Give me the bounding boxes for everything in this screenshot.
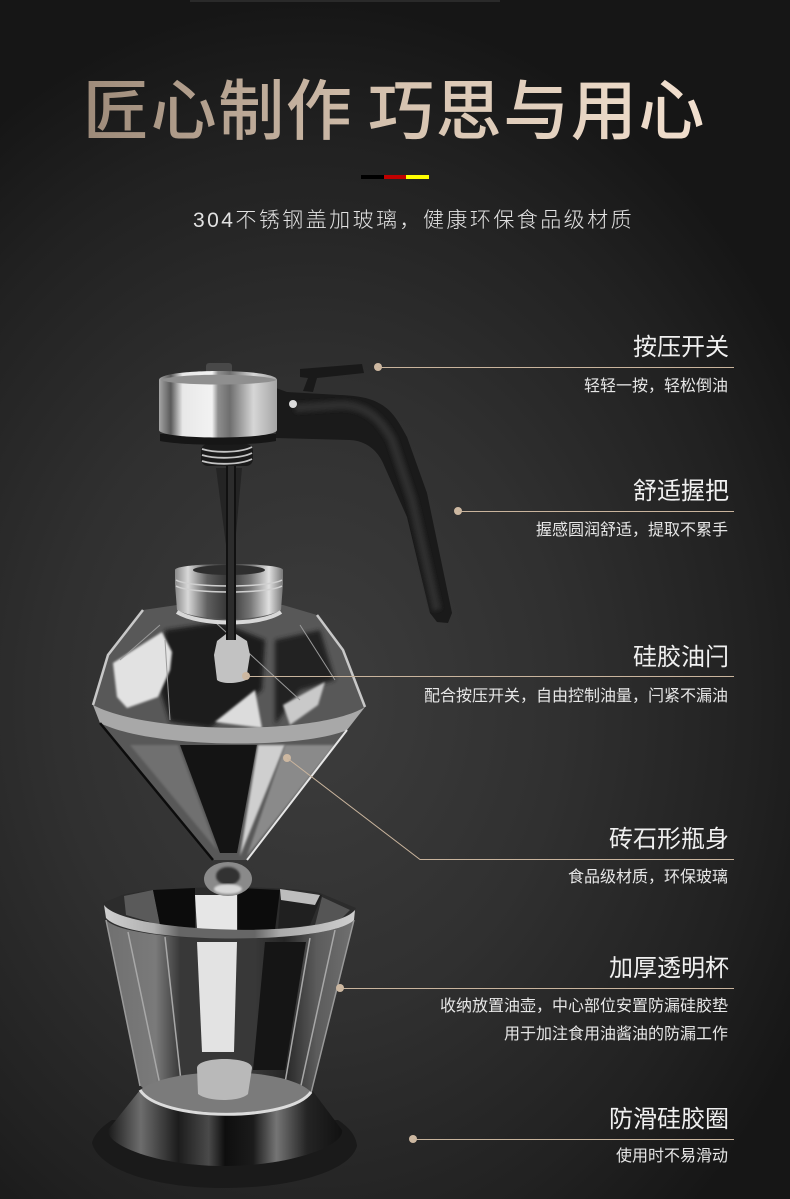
neck <box>175 564 283 619</box>
handle <box>276 364 452 623</box>
tricolour bar <box>361 175 429 179</box>
callout: thick cup <box>336 955 734 1043</box>
callout: anti-slip ring: 使用时不易滑动 <box>616 1147 728 1165</box>
callout: press switch <box>374 334 734 395</box>
callout: diamond bottle: 食品级材质，环保玻璃 <box>568 868 728 886</box>
callout: anti-slip ring <box>409 1106 734 1165</box>
callout: diamond bottle: 砖石形瓶身 <box>609 826 729 853</box>
callout: thick cup: 加厚透明杯 <box>609 955 729 982</box>
callout: press switch: 按压开关 <box>633 334 729 361</box>
callout: comfortable grip: 握感圆润舒适，提取不累手 <box>536 521 728 539</box>
callout: press switch: 轻轻一按，轻松倒油 <box>584 377 728 395</box>
product: oil dispenser <box>92 363 452 1188</box>
title: 匠心制作 <box>83 74 353 148</box>
thick transparent cup <box>103 887 356 1114</box>
callout: silicone valve <box>242 644 734 705</box>
callout: diamond bottle <box>283 754 734 886</box>
callout: comfortable grip <box>454 478 734 539</box>
rod and spout <box>216 462 242 640</box>
callout: anti-slip ring: 防滑硅胶圈 <box>609 1106 729 1133</box>
diamond bottle <box>93 564 365 896</box>
bottom bulb <box>204 862 252 896</box>
callout: thick cup: 收纳放置油壶，中心部位安置防漏硅胶垫 <box>440 997 728 1015</box>
spring <box>201 444 253 466</box>
callout: silicone valve: 配合按压开关，自由控制油量，闩紧不漏油 <box>424 687 728 705</box>
top edge remnant <box>190 0 500 2</box>
cup stand <box>92 1090 357 1188</box>
callout: silicone valve: 硅胶油闩 <box>633 644 729 671</box>
subtitle: 304不锈钢盖加玻璃，健康环保食品级材质 <box>193 209 634 232</box>
callout: thick cup: 用于加注食用油酱油的防漏工作 <box>504 1025 728 1043</box>
stainless lid <box>159 363 277 445</box>
silicone pad <box>197 1059 252 1100</box>
silicone valve <box>214 634 250 683</box>
title: 巧思与用心 <box>368 74 706 148</box>
callout: comfortable grip: 舒适握把 <box>633 478 729 505</box>
